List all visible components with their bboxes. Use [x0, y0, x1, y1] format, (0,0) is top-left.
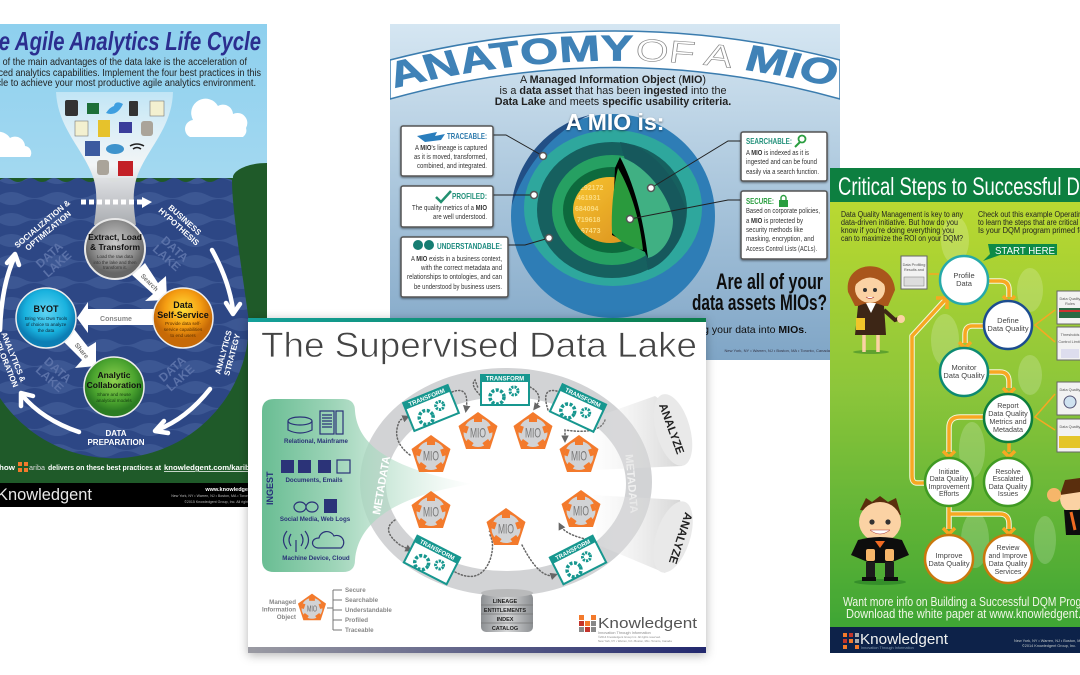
- supervised data lake content: [248, 318, 706, 653]
- watermarks: data lake: LAKE: [150, 242, 183, 274]
- node: extract load transform: [85, 219, 145, 279]
- legend: managed information object: Profiled: [345, 617, 368, 624]
- call to action line: delivers on these best practices at: [48, 463, 161, 472]
- node: byot: the data: [38, 328, 55, 333]
- logo: knowledgent: Innovation Through Information: [598, 631, 651, 635]
- legend: managed information object: Object: [277, 614, 296, 621]
- callout: searchable: A MIO is indexed as it is: [746, 150, 809, 157]
- document: profiling results: Data Profiling: [903, 263, 925, 267]
- logo: knowledgent: [579, 615, 698, 643]
- node: extract load transform: transform it.: [103, 265, 127, 270]
- arrowheads: [936, 296, 1015, 534]
- node: byot: Bring You Own Tools: [25, 316, 68, 321]
- step: review services: Data Quality: [989, 561, 1028, 568]
- footer line: [706, 326, 830, 352]
- footer line: New York, NY • Warren, NJ • Boston, MA • Toronto, Canada: [724, 348, 831, 353]
- node: analytic collaboration: Collaboration: [87, 380, 141, 390]
- logo: knowledgent: ©2014 Knowledgent Group Inc. All rights reserved.: [598, 635, 661, 639]
- watermarks: data lake: DATA: [158, 233, 191, 265]
- logo: knowledgent: Knowledgent: [598, 615, 698, 632]
- legend: managed information object: [262, 587, 392, 634]
- node: analytic collaboration: Analytic: [97, 370, 131, 380]
- intro text: [0, 56, 261, 89]
- footer: knowledgent: ©2015 Knowledgent Group, Inc. All rights reserved.: [184, 500, 266, 504]
- node: byot: [16, 288, 76, 348]
- question text: [692, 273, 826, 310]
- step: monitor data quality: Data Quality: [943, 371, 985, 380]
- definition text: [495, 74, 731, 108]
- document: profiling results: Results and: [904, 268, 924, 272]
- node: analytic collaboration: Share and reuse: [97, 392, 131, 397]
- title: anatomy of a mio: ANATOMY: [395, 35, 634, 88]
- sphere: [511, 114, 715, 318]
- mio pentagons: MIO: [573, 502, 589, 518]
- transform boxes: TRANSFORM: [564, 388, 601, 409]
- database stack: INDEX: [497, 617, 514, 623]
- mio pentagons: MIO: [423, 448, 439, 464]
- watermarks: data lake: DATA: [33, 239, 66, 271]
- callout: understandable: with the correct metadata and: [420, 265, 502, 272]
- banner: [390, 31, 840, 99]
- cycle labels: OPTIMIZATION: [24, 209, 73, 253]
- step: review services: Services: [995, 569, 1022, 576]
- document: profiling results: [901, 256, 927, 289]
- callout: secure: Access Control Lists (ACLs).: [746, 246, 817, 253]
- analyze cones: [593, 390, 701, 577]
- callout: understandable: UNDERSTANDABLE:: [437, 241, 502, 251]
- call to action: [843, 594, 1080, 621]
- analyze cones: ANALYZE: [656, 402, 686, 456]
- arrow: search: Search: [139, 273, 159, 293]
- intro text: right: [978, 210, 1080, 235]
- character: businesswoman: [848, 266, 905, 354]
- analyze cones: ANALYZE: [666, 511, 694, 565]
- mio pentagons: MIO: [470, 424, 486, 440]
- watermarks: data lake: LAKE: [41, 248, 74, 280]
- legend: managed information object: Searchable: [345, 597, 379, 604]
- source icons: [65, 100, 164, 176]
- mio pentagons: MIO: [423, 504, 439, 520]
- step: report metrics: Metrics and: [989, 417, 1027, 426]
- legend: managed information object: MIO: [307, 604, 317, 614]
- step: improve data quality: Data Quality: [928, 559, 970, 568]
- green land: [0, 163, 267, 483]
- node: data self-service: Data: [173, 300, 194, 310]
- call to action line: ariba: [29, 463, 46, 472]
- callout: searchable: SEARCHABLE:: [746, 136, 792, 146]
- intro text: left: know if you're doing everything you: [841, 226, 954, 235]
- mio pentagons: MIO: [525, 424, 541, 440]
- dotted arrow: top: [81, 197, 152, 208]
- callout: searchable: easily via a search function.: [746, 169, 819, 176]
- node: data self-service: Self-Service: [157, 310, 209, 320]
- step: resolve issues: Escalated: [993, 476, 1023, 483]
- callout: searchable: [741, 132, 827, 181]
- sphere: 461931: [577, 195, 600, 202]
- intro text: left: [841, 210, 963, 243]
- node: data self-service: to end users: [170, 333, 196, 338]
- top bar: [248, 318, 706, 322]
- callout: understandable: be understood by business users.: [414, 284, 502, 291]
- transform boxes: TRANSFORM: [555, 539, 592, 562]
- step: define data quality: Define: [997, 316, 1019, 325]
- documents: right column: Rules: [1065, 302, 1075, 306]
- cycle labels: PREPARATION: [87, 438, 145, 447]
- doc arrows: [929, 274, 1055, 430]
- legend: managed information object: Information: [262, 606, 296, 614]
- watermarks: data lake: LAKE: [33, 363, 66, 395]
- step: initiate improvement: [925, 458, 973, 506]
- callout: secure: a MIO is protected by: [746, 218, 803, 225]
- dotted flow paths: [389, 380, 605, 576]
- step: report metrics: Report: [997, 401, 1019, 410]
- transform boxes: TRANSFORM: [408, 388, 446, 408]
- documents: right column: [1057, 291, 1080, 452]
- cycle labels: [0, 198, 243, 447]
- panel: supervised data lake: [248, 318, 706, 653]
- intro text: left: Data Quality Management is key to any: [841, 210, 963, 219]
- callout: secure: masking, encryption, and: [746, 236, 814, 243]
- question text: data assets MIOs?: [692, 290, 827, 315]
- node: extract load transform: & Transform: [90, 242, 140, 252]
- step: profile data: [940, 256, 988, 304]
- definition text: is a data asset that has been ingested into the: [500, 85, 726, 97]
- footprints: [931, 216, 1056, 568]
- footer line: Start getting your data into MIOs.: [652, 324, 807, 336]
- footer: knowledgent: www.knowledgent.com: [204, 487, 266, 493]
- cycle labels: ANALYTICS: [213, 329, 234, 375]
- node: analytic collaboration: [84, 357, 144, 417]
- step: profile data: Profile: [953, 271, 975, 280]
- cycle labels: BUSINESS: [166, 203, 203, 237]
- ingest sources: Relational, Mainframe: [284, 438, 349, 445]
- sphere: 67473: [581, 228, 601, 235]
- ingest sources: Social Media, Web Logs: [280, 516, 351, 523]
- sphere: 292172: [580, 185, 603, 192]
- cycle labels: DATA: [105, 429, 127, 438]
- database stack: ENTITLEMENTS: [484, 608, 526, 614]
- call to action line: [0, 462, 255, 472]
- step: monitor data quality: [940, 348, 988, 396]
- cycle labels: HYPOTHESIS: [156, 206, 201, 248]
- watermarks: data lake: [32, 233, 197, 395]
- callout: secure: Based on corporate policies,: [746, 208, 820, 215]
- ingest panel: [262, 399, 472, 572]
- callout: traceable: combined, and integrated.: [417, 163, 487, 170]
- callout: profiled: PROFILED:: [452, 191, 487, 201]
- transform boxes: TRANSFORM: [486, 376, 524, 382]
- cycle labels: STRATEGY: [222, 332, 242, 377]
- lake water: [0, 178, 249, 458]
- leader dots: [530, 152, 654, 242]
- arrow: consume: Consume: [100, 316, 132, 323]
- step: initiate improvement: Improvement: [929, 484, 969, 491]
- step: monitor data quality: Monitor: [951, 363, 977, 372]
- clouds: [0, 99, 247, 157]
- cycle labels: SOCIALIZATION &: [13, 198, 72, 250]
- node: data self-service: Provide data self-: [165, 321, 201, 326]
- footer: knowledgent: [0, 483, 267, 507]
- step: review services: [984, 535, 1032, 583]
- callout: traceable: as it is moved, transformed,: [414, 154, 487, 161]
- transform boxes: TRANSFORM: [418, 539, 455, 562]
- funnel: [56, 92, 173, 225]
- arrow: share: Share: [73, 342, 90, 360]
- cycle arrows: [0, 250, 240, 433]
- definition text: Data Lake and meets specific usability criteria.: [495, 96, 731, 108]
- ring labels: metadata: METADATA: [371, 455, 393, 516]
- node: data self-service: service capabilities: [164, 327, 203, 332]
- definition text: A Managed Information Object (MIO): [520, 74, 706, 86]
- legend: managed information object: Secure: [345, 587, 366, 594]
- character: thumbs up man: [851, 496, 909, 585]
- question text: Are all of your: [716, 269, 823, 294]
- node: data self-service: [153, 288, 213, 348]
- footer: knowledgent: [830, 627, 1080, 653]
- database stack: CATALOG: [492, 626, 518, 632]
- step: report metrics: [984, 394, 1032, 442]
- sphere: 684094: [575, 206, 598, 213]
- step: review services: and Improve: [989, 553, 1028, 560]
- node: extract load transform: Extract, Load: [88, 232, 142, 242]
- arrow: search: [132, 263, 167, 301]
- arrow: share: [62, 329, 96, 368]
- step: initiate improvement: Initiate: [939, 469, 959, 476]
- step: define data quality: Data Quality: [987, 324, 1029, 333]
- callout: understandable: A MIO exists in a business context,: [411, 256, 502, 263]
- ingest sources: Machine Device, Cloud: [282, 555, 350, 562]
- watermarks: data lake: LAKE: [164, 362, 197, 394]
- orange flow arrows: [912, 281, 1009, 529]
- footer: knowledgent: ©2014 Knowledgent Group, Inc.: [1022, 644, 1076, 648]
- documents: right column: Data Quality: [1060, 425, 1080, 429]
- title: anatomy of a mio: [395, 35, 837, 88]
- title: anatomy of a mio: MIO: [746, 45, 837, 84]
- title: anatomy of a mio: OF A: [638, 39, 731, 68]
- watermarks: data lake: DATA: [156, 353, 189, 385]
- flow arrows outline: [912, 281, 1009, 529]
- intro text: left: data-driven initiative. But how do you: [841, 218, 958, 227]
- node: extract load transform: Load the raw data: [97, 254, 134, 259]
- node: byot: of choice to analyze: [26, 322, 67, 327]
- title: supervised data lake: The Supervised Data Lake: [261, 326, 697, 365]
- panel: agile analytics life cycle: [0, 24, 267, 507]
- callout: profiled: are well understood.: [433, 214, 487, 221]
- bottom bar: [248, 647, 706, 653]
- callout: understandable: relationships to ontologies, and can: [407, 274, 502, 281]
- heading: a mio is: A MIO is:: [566, 109, 664, 135]
- legend: managed information object: Understandable: [345, 607, 392, 614]
- step: review services: Review: [997, 545, 1020, 552]
- intro text: left: can to maximize the ROI on your DQM?: [841, 234, 963, 243]
- mio pentagons: MIO: [571, 448, 587, 464]
- step: profile data: Data: [956, 279, 973, 288]
- panel: critical steps: [830, 168, 1080, 653]
- ingest sources: Documents, Emails: [285, 477, 343, 484]
- callout: traceable: A MIO's lineage is captured: [415, 145, 487, 152]
- callout: profiled: The quality metrics of a MIO: [412, 205, 487, 212]
- callout: traceable: TRACEABLE:: [447, 131, 487, 141]
- leader lines: [493, 135, 741, 245]
- legend: managed information object: Managed: [269, 599, 296, 606]
- mio pentagons: MIO: [498, 520, 514, 536]
- footer: knowledgent: Knowledgent: [860, 632, 948, 648]
- character: man on right: [1047, 478, 1080, 535]
- callout: secure: [741, 191, 827, 259]
- step: improve data quality: Improve: [935, 551, 963, 560]
- footer: knowledgent: Innovation Through Information: [861, 646, 914, 650]
- callout: secure: SECURE:: [746, 196, 774, 206]
- arrow: consume: [77, 302, 156, 333]
- watermarks: data lake: DATA: [41, 354, 74, 386]
- start here flag: START HERE: [995, 245, 1055, 257]
- database stack: LINEAGE: [493, 599, 518, 605]
- ring labels: metadata: [371, 454, 640, 516]
- sphere: 719618: [577, 217, 600, 224]
- step: initiate improvement: Data Quality: [930, 476, 969, 483]
- step: resolve issues: Data Quality: [989, 484, 1028, 491]
- start here flag: [983, 244, 1057, 261]
- step: resolve issues: Resolve: [995, 469, 1021, 476]
- step: resolve issues: Issues: [998, 491, 1019, 498]
- cycle labels: ANALYTICS &: [0, 331, 27, 383]
- documents: right column: Data Quality: [1060, 388, 1080, 392]
- documents: right column: Thresholds: [1061, 333, 1079, 337]
- ring labels: metadata: METADATA: [622, 454, 640, 514]
- node: extract load transform: into the lake and then: [93, 260, 137, 265]
- call to action line: knowledgent.com/kariba: [164, 463, 255, 472]
- node: byot: BYOT: [33, 304, 59, 314]
- transform boxes: [403, 375, 606, 584]
- footer: knowledgent: New York, NY • Warren, NJ • Boston, MA • Toronto, Canada: [171, 494, 266, 498]
- step: report metrics: Data Quality: [988, 409, 1028, 418]
- step: resolve issues: [984, 458, 1032, 506]
- ingest sources: [280, 411, 351, 562]
- database stack: [481, 589, 533, 632]
- documents: right column: Data Quality: [1060, 297, 1080, 301]
- metadata ring: [360, 368, 652, 596]
- mio pentagons: [412, 412, 600, 545]
- callout: traceable: [401, 126, 493, 176]
- node: analytic collaboration: analytical models: [96, 398, 132, 403]
- callout: profiled: [401, 186, 493, 227]
- callout: understandable: [401, 237, 508, 297]
- step: define data quality: [984, 301, 1032, 349]
- panel: anatomy of a mio: [390, 24, 840, 360]
- ingest heading: INGEST: [265, 471, 275, 505]
- callout: searchable: ingested and can be found: [746, 159, 817, 166]
- logo: knowledgent: New York, NY • Warren, NJ • Boston, MA • Toronto, Canada: [598, 639, 672, 643]
- step: initiate improvement: Efforts: [939, 491, 960, 498]
- step: improve data quality: [925, 535, 973, 583]
- legend: managed information object: Traceable: [345, 627, 374, 634]
- step: report metrics: Metadata: [993, 425, 1023, 434]
- callout: secure: security methods like: [746, 227, 803, 234]
